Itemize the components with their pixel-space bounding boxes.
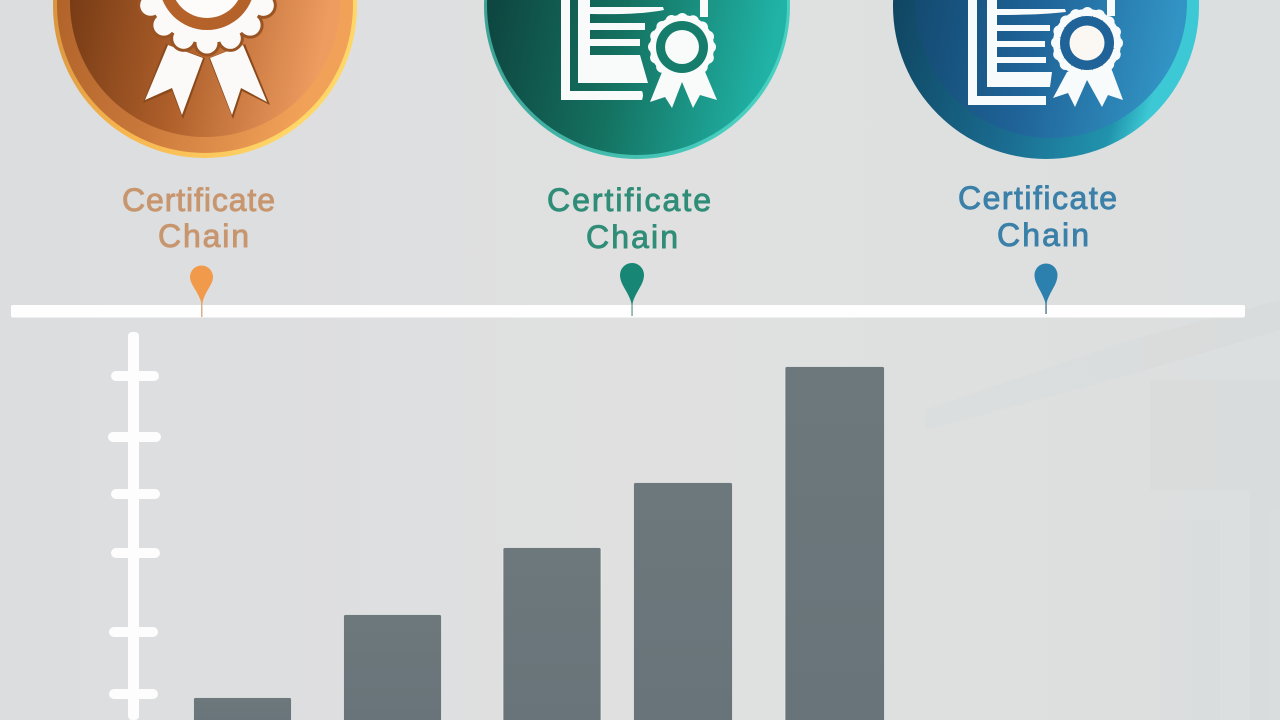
badge: orange award ribbon: [53, 0, 357, 158]
orange circle: [53, 0, 357, 158]
bar 5: [785, 366, 884, 720]
label: orange certificate chain: Certificate: [122, 182, 275, 218]
certificate document icon: [968, 0, 1115, 105]
label: blue certificate chain: Chain: [997, 217, 1089, 253]
label: green certificate chain: Certificate: [547, 182, 711, 218]
badge: blue certificate: [893, 0, 1199, 159]
label: orange certificate chain: [122, 182, 275, 254]
certificate seal: [1053, 12, 1123, 107]
label: green certificate chain: Chain: [586, 219, 678, 255]
badge: green certificate: [484, 0, 790, 159]
rosette seal: [143, 0, 270, 119]
certificate document icon: [561, 0, 708, 100]
timeline marker: blue pin: [1034, 264, 1058, 314]
label: orange certificate chain: Chain: [158, 218, 249, 254]
bar chart: [194, 366, 884, 720]
timeline marker: orange pin: [190, 266, 213, 317]
label: green certificate chain: [547, 182, 711, 255]
bar 1: [194, 698, 292, 720]
label: blue certificate chain: Certificate: [958, 180, 1117, 216]
bar 2: [344, 614, 442, 720]
vertical axis with ticks: [108, 332, 161, 720]
certificate seal: [650, 18, 717, 108]
bar 4: [634, 482, 732, 720]
label: blue certificate chain: [958, 180, 1117, 253]
timeline: [11, 263, 1245, 318]
blue circle: [893, 0, 1199, 159]
timeline marker: green pin: [620, 263, 644, 316]
green circle: [484, 0, 790, 159]
bar 3: [503, 548, 601, 720]
